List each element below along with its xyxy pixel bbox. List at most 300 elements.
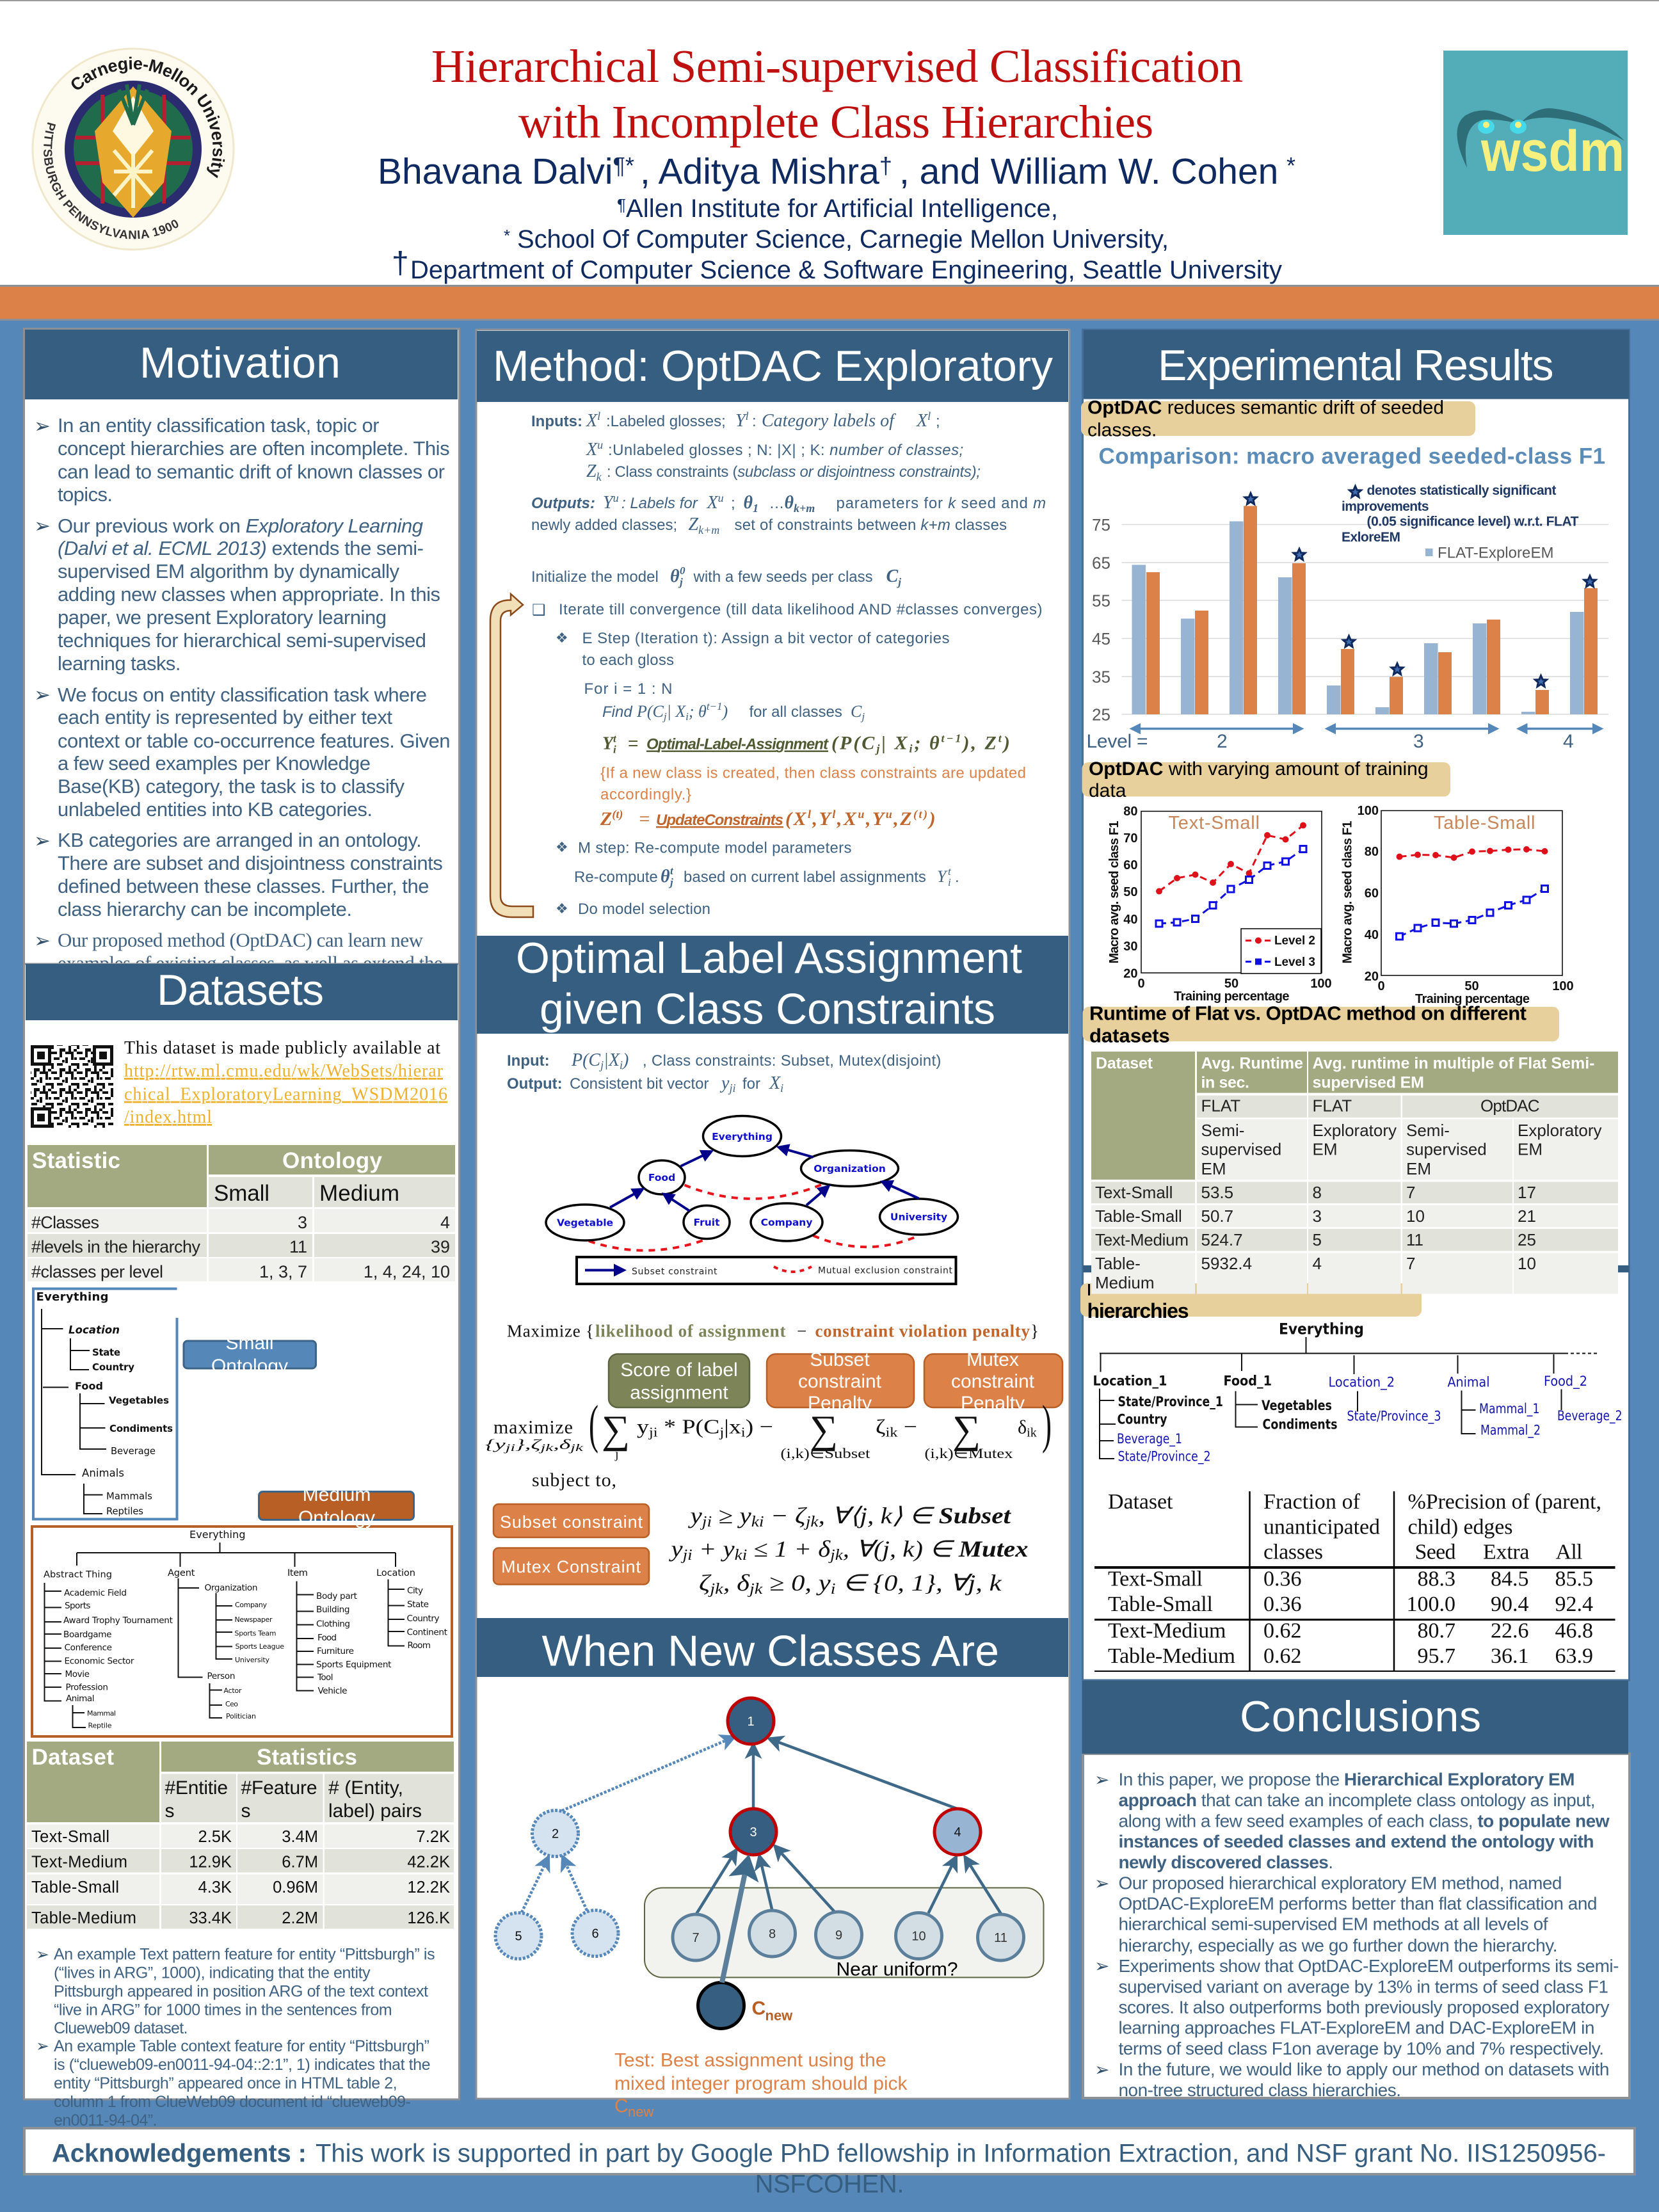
- table: dataset statistics: [27, 1742, 454, 1929]
- optimization objective formula: },ζ: [515, 1436, 543, 1452]
- new class tree diagram: 4: [954, 1825, 961, 1839]
- button: subset constraint: Subset constraint: [500, 1512, 643, 1532]
- table: ontology statistics: Small: [214, 1181, 269, 1206]
- optimal label assignment heading: given Class Constraints: [540, 984, 995, 1033]
- bar chart: macro averaged F1: 25: [1092, 705, 1110, 725]
- table: dataset statistics: 2.5K: [198, 1828, 232, 1846]
- optimization objective formula: (: [589, 1395, 598, 1454]
- conclusions bullet arrows: ➢: [1094, 1873, 1109, 1894]
- affiliations: School Of Computer Science, Carnegie Mellon University,: [510, 225, 1169, 253]
- button: medium ontology: [259, 1484, 413, 1528]
- method body text: j: [678, 576, 683, 588]
- line chart: Text-Small: [1107, 805, 1332, 1004]
- method body text: Class constraints (: [614, 463, 737, 481]
- medium ontology tree: State: [407, 1599, 429, 1610]
- method body text: (t): [612, 808, 623, 821]
- conclusions body text: learning approaches FLAT-ExploreEM and DAC-ExploreEM in: [1119, 2017, 1595, 2038]
- new class tree diagram: 9: [835, 1928, 842, 1943]
- method body text: Iterate till convergence (till data likelihood AND #classes converges): [559, 601, 1042, 618]
- table: runtime: 5932.4: [1201, 1254, 1252, 1273]
- feature example notes: [36, 1945, 435, 2129]
- constraint graph: Company: [761, 1217, 812, 1228]
- dataset availability text: http://rtw.ml.cmu.edu/wk/WebSets/hierar: [124, 1061, 444, 1081]
- medium ontology tree: Food: [317, 1633, 337, 1643]
- table: dataset statistics: 6.7M: [282, 1854, 318, 1871]
- method body text: k seed and m: [948, 495, 1046, 512]
- medium ontology tree: Sports League: [236, 1642, 284, 1651]
- motivation body text: adding new classes when appropriate. In this: [58, 583, 440, 605]
- method heading: [477, 331, 1068, 442]
- small ontology tree: Mammals: [106, 1491, 152, 1502]
- callout: subset constraint penalty: [767, 1349, 914, 1414]
- table: precision of edges: 22.6: [1491, 1619, 1528, 1642]
- constraint formulas: jk: [747, 1581, 763, 1598]
- constraint formulas: [669, 1503, 1028, 1598]
- table: runtime: EM: [1406, 1159, 1431, 1178]
- conclusions body text: approach that can take an incomplete class ontology as input,: [1119, 1790, 1595, 1810]
- medium ontology tree: Agent: [168, 1567, 195, 1578]
- constraint formulas: ≥ 0, y: [762, 1570, 831, 1596]
- table: runtime: 53.5: [1201, 1183, 1233, 1202]
- medium ontology tree: Furniture: [317, 1646, 354, 1656]
- table: dataset statistics: 2.2M: [282, 1909, 318, 1927]
- medium ontology tree: [32, 1527, 452, 1736]
- discovered hierarchy tree: Location_1: [1093, 1374, 1167, 1389]
- new class tree diagram: new: [765, 2007, 793, 2024]
- maximize objective sentence: constraint violation penalty: [815, 1321, 1030, 1340]
- panel: Method and constraints column: [476, 330, 1070, 2120]
- optimization objective formula: ζ: [876, 1415, 884, 1438]
- banner: training data: OptDAC with varying amount of training: [1089, 758, 1429, 780]
- table: runtime: 10: [1406, 1206, 1425, 1226]
- method body text: l: [746, 410, 749, 422]
- motivation body text: In an entity classification task, topic or: [58, 414, 380, 437]
- method body text: with a few seeds per class: [693, 568, 873, 586]
- acknowledgements: NSFCOHEN.: [755, 2170, 904, 2198]
- title: [431, 40, 1243, 148]
- medium ontology tree: Newspaper: [234, 1615, 273, 1624]
- table: runtime: 7: [1406, 1254, 1415, 1273]
- motivation body text: context or table co-occurrence features. Given: [58, 730, 451, 752]
- table: precision of edges: 90.4: [1491, 1592, 1528, 1616]
- table: precision of edges: Fraction of: [1263, 1490, 1361, 1514]
- medium ontology tree: Person: [207, 1671, 236, 1681]
- method body text: u: [718, 492, 724, 504]
- conclusions body text: newly discovered classes.: [1119, 1852, 1333, 1872]
- new class tree diagram: Near uniform?: [836, 1959, 958, 1980]
- small ontology tree: Condiments: [109, 1423, 173, 1434]
- method body text: for all classes: [749, 703, 842, 721]
- affiliations: Department of Computer Science & Software Engineering, Seattle University: [410, 256, 1282, 284]
- medium ontology tree: Sports Equipment: [316, 1660, 392, 1670]
- constraint formulas: jk: [708, 1581, 723, 1598]
- callout: subset constraint penalty: Subset: [810, 1349, 870, 1370]
- QR code: [31, 1045, 113, 1128]
- maximize objective sentence: −: [797, 1321, 806, 1340]
- feature example notes: (“lives in ARG”, 1000), indicating that the entity: [54, 1964, 371, 1982]
- method body text: {If a new class is created, then class constraints are updated: [600, 764, 1026, 782]
- method body text: X: [707, 493, 718, 513]
- medium ontology tree: Actor: [224, 1687, 242, 1695]
- input output text: Consistent bit vector: [570, 1075, 709, 1093]
- new class tree diagram: 6: [591, 1927, 599, 1941]
- constraint formulas: Subset: [939, 1503, 1011, 1528]
- small ontology tree: Everything: [36, 1290, 109, 1304]
- table: precision of edges: %Precision of (parent,: [1408, 1490, 1601, 1514]
- table: precision of edges: 85.5: [1555, 1567, 1593, 1591]
- line chart: Text-Small: 80: [1123, 805, 1138, 819]
- table: precision of edges: classes: [1263, 1540, 1323, 1564]
- medium ontology tree: Boardgame: [63, 1630, 111, 1640]
- title: with Incomplete Class Hierarchies: [518, 96, 1153, 148]
- bullet arrows: ➢: [34, 830, 51, 853]
- line chart: Text-Small: 20: [1123, 966, 1138, 981]
- method body text: u: [886, 808, 894, 821]
- chart title: Comparison: macro averaged seeded-class F1: [1098, 444, 1605, 469]
- optimization objective formula: jk: [568, 1443, 584, 1454]
- method body text: UpdateConstraints: [656, 812, 783, 829]
- motivation body text: There are subset and disjointness constraints: [58, 852, 443, 874]
- new class tree diagram: 5: [515, 1929, 522, 1943]
- input output text: P(C: [571, 1050, 600, 1070]
- table: runtime: Table-: [1095, 1254, 1141, 1273]
- table: precision of edges: 63.9: [1555, 1644, 1593, 1668]
- conclusions bullet arrows: ➢: [1094, 2059, 1109, 2080]
- line chart: Table-Small: 100: [1552, 979, 1574, 993]
- method body text: newly added classes;: [531, 517, 677, 534]
- table: precision of edges: Table-Small: [1108, 1592, 1213, 1616]
- test note: mixed integer program should pick: [614, 2073, 908, 2094]
- table: precision of edges: Seed: [1415, 1540, 1455, 1564]
- line chart: Text-Small: Training percentage: [1174, 990, 1289, 1004]
- method body text: Optimal-Label-Assignment: [646, 736, 829, 753]
- callout: score of label assignment: [609, 1354, 749, 1407]
- table: runtime: Text-Small: [1095, 1183, 1173, 1202]
- new class tree diagram: 10: [911, 1929, 926, 1943]
- method body text: Inputs:: [531, 413, 582, 430]
- optimization objective formula: i: [741, 1425, 746, 1440]
- method body text: :Labeled glosses;: [606, 413, 726, 430]
- medium ontology tree: University: [235, 1656, 269, 1664]
- table: precision of edges: Extra: [1483, 1540, 1530, 1564]
- method body text: Y: [735, 411, 748, 431]
- method body text: k+m: [698, 524, 719, 536]
- results heading: [1084, 330, 1629, 399]
- callout: subset constraint penalty: Penalty: [808, 1393, 872, 1414]
- table: ontology statistics: 1, 3, 7: [259, 1262, 307, 1281]
- line chart: Table-Small: 50: [1464, 979, 1479, 993]
- method body text: Outputs:: [531, 495, 595, 512]
- line chart: Text-Small: Macro avg. seed class F1: [1107, 821, 1121, 964]
- optimal label assignment heading: Optimal Label Assignment: [516, 934, 1022, 982]
- method body text: (t): [913, 808, 929, 821]
- bullet arrows: ➢: [34, 684, 51, 707]
- small ontology tree: State: [92, 1347, 120, 1358]
- motivation body text: each entity is represented by either text: [58, 706, 392, 728]
- method body text: P(C: [636, 702, 664, 721]
- conclusions body text: non-tree structured class hierarchies.: [1119, 2080, 1401, 2100]
- banner: training data: [1082, 758, 1450, 801]
- small ontology tree: Vegetables: [109, 1395, 169, 1406]
- line chart: Table-Small: 0: [1377, 979, 1385, 993]
- method body text: j: [896, 576, 901, 588]
- input output text: i: [620, 1059, 623, 1071]
- banner: runtime: Runtime of Flat vs. OptDAC method on different: [1089, 1002, 1527, 1024]
- table: runtime: Exploratory: [1518, 1121, 1601, 1140]
- line chart: Table-Small: 40: [1365, 928, 1379, 942]
- method bullet icons: ❖: [556, 840, 568, 856]
- new class tree diagram: [495, 1698, 1043, 2029]
- feature example notes: Clueweb09 dataset.: [54, 2019, 188, 2037]
- method body text: j: [668, 876, 673, 888]
- table: dataset statistics: Table-Medium: [31, 1909, 136, 1927]
- line chart: Table-Small: 60: [1365, 886, 1379, 901]
- table: precision of edges: 92.4: [1555, 1592, 1593, 1616]
- poster header: [0, 0, 1659, 321]
- method body text: =: [637, 808, 651, 830]
- table: runtime: 7: [1406, 1183, 1415, 1202]
- callout: score of label assignment: Score of label: [620, 1359, 738, 1381]
- table: ontology statistics: Medium: [319, 1181, 399, 1206]
- optimal label assignment heading: [477, 934, 1068, 1034]
- method body text: C: [851, 702, 862, 721]
- method body text: Initialize the model: [531, 568, 659, 586]
- discovered hierarchy tree: Condiments: [1262, 1417, 1338, 1432]
- input output text: Input:: [507, 1052, 550, 1070]
- optimization objective formula: (i,k)∈Mutex: [924, 1445, 1013, 1461]
- method body text: θ: [785, 493, 794, 513]
- table: precision of edges: Text-Medium: [1108, 1619, 1226, 1642]
- table: precision of edges: unanticipated: [1263, 1516, 1380, 1539]
- method body text: ): [927, 808, 937, 830]
- conclusions bullet arrows: [1094, 1769, 1109, 2080]
- feature example notes: ➢: [36, 2037, 49, 2055]
- optimization objective formula: ji: [503, 1443, 515, 1454]
- line chart: Table-Small: Training percentage: [1415, 992, 1530, 1006]
- button: mutex constraint: [493, 1548, 649, 1585]
- medium ontology tree: Company: [235, 1601, 267, 1609]
- motivation body text: concept hierarchies are often incomplete. This: [58, 437, 450, 460]
- motivation body text: learning tasks.: [58, 652, 180, 675]
- table: ontology statistics: 1, 4, 24, 10: [364, 1262, 450, 1281]
- method body text: Y: [602, 733, 615, 754]
- graph legend: Subset constraint: [632, 1267, 717, 1277]
- table: ontology statistics: #Classes: [31, 1213, 99, 1232]
- table: precision of edges: child) edges: [1408, 1516, 1513, 1539]
- method body text: M step: Re-compute model parameters: [578, 840, 851, 856]
- button: medium ontology: Ontology: [298, 1507, 375, 1528]
- small ontology tree: Animals: [82, 1467, 124, 1479]
- method body text: u: [597, 438, 603, 451]
- table: runtime: 10: [1518, 1254, 1536, 1273]
- table: ontology statistics: 11: [289, 1237, 307, 1256]
- new class tree diagram: 8: [769, 1927, 776, 1941]
- input output text: ): [621, 1050, 629, 1070]
- test note: new: [628, 2104, 653, 2120]
- medium ontology tree: Item: [287, 1567, 308, 1578]
- table: runtime: Avg. Runtime: [1201, 1055, 1303, 1073]
- button: subset constraint: [493, 1504, 649, 1537]
- medium ontology tree: Mammal: [87, 1709, 116, 1718]
- medium ontology tree: Award Trophy Tournament: [63, 1615, 173, 1626]
- banner: training data: data: [1089, 780, 1126, 801]
- constraint formulas: ji: [680, 1547, 693, 1564]
- method body text: : Labels for: [621, 495, 698, 512]
- optimization objective formula: subject to,: [532, 1470, 616, 1491]
- new class tree diagram: 3: [749, 1825, 757, 1839]
- button: mutex constraint: Mutex Constraint: [501, 1557, 641, 1576]
- banner: semantic drift: [1081, 397, 1475, 440]
- new classes heading: When New Classes Are: [541, 1627, 999, 1676]
- medium ontology tree: Politician: [226, 1712, 256, 1720]
- constraint formulas: , ∀⟨j, k⟩ ∈: [819, 1503, 939, 1528]
- method body text: Y: [937, 867, 948, 886]
- discovered hierarchy tree: Mammal_1: [1479, 1401, 1540, 1417]
- callout: subset constraint penalty: constraint: [798, 1371, 882, 1392]
- method body text: Z: [600, 808, 612, 830]
- near uniform region: [645, 1888, 1043, 1978]
- level labels: Level =: [1087, 731, 1148, 752]
- table: precision of edges: 95.7: [1417, 1644, 1455, 1668]
- table: runtime: 11: [1406, 1230, 1423, 1249]
- discovered hierarchy tree: Vegetables: [1262, 1398, 1332, 1413]
- table: precision of edges: 88.3: [1417, 1567, 1455, 1591]
- medium ontology tree: Sports Team: [234, 1630, 276, 1637]
- medium ontology tree: Economic Sector: [64, 1656, 134, 1667]
- method body text: =: [628, 733, 638, 753]
- new class tree diagram: 2: [552, 1827, 559, 1841]
- authors: ¶*: [613, 152, 634, 179]
- method body text: ), Z: [961, 732, 998, 754]
- medium ontology tree: Reptile: [88, 1722, 112, 1729]
- constraint formulas: ki: [751, 1514, 764, 1530]
- method body text: X: [916, 411, 928, 431]
- panel: Datasets: [24, 964, 460, 2129]
- table: dataset statistics: #Entitie: [165, 1777, 228, 1799]
- optimization objective formula: ik: [1027, 1426, 1037, 1440]
- input output text: for: [742, 1075, 760, 1093]
- table: runtime: Medium: [1095, 1273, 1154, 1292]
- method body text: X: [586, 440, 598, 460]
- constraint formulas: ∈ {0, 1}, ∀j, k: [836, 1570, 1002, 1596]
- table: dataset statistics: 7.2K: [417, 1828, 450, 1846]
- table: dataset statistics: 4.3K: [198, 1879, 232, 1896]
- graph legend: Mutual exclusion constraint: [818, 1266, 952, 1276]
- medium ontology tree: Sports: [65, 1601, 91, 1611]
- method body text: k+m: [794, 502, 815, 515]
- datasets heading: Datasets: [157, 966, 324, 1014]
- table: runtime: Table-Small: [1095, 1206, 1182, 1226]
- test note: C: [614, 2096, 629, 2117]
- input output text: |X: [604, 1050, 620, 1070]
- table: dataset statistics: Statistics: [257, 1745, 357, 1770]
- line chart: Text-Small: 50: [1123, 885, 1138, 899]
- method body text: …: [769, 495, 785, 512]
- medium ontology tree: Organization: [205, 1583, 257, 1593]
- conclusions body text: Experiments show that OptDAC-ExploreEM outperforms its semi-: [1119, 1956, 1619, 1976]
- method body text: set of constraints between: [735, 517, 920, 534]
- table: runtime: FLAT: [1312, 1096, 1352, 1115]
- motivation body text: We focus on entity classification task where: [58, 684, 427, 706]
- small ontology tree: [33, 1289, 177, 1519]
- method body text: .: [955, 869, 959, 886]
- table: ontology statistics: [28, 1145, 455, 1281]
- authors: , and William W. Cohen: [899, 151, 1278, 192]
- small ontology tree: Food: [75, 1380, 103, 1392]
- input output text: i: [780, 1082, 783, 1094]
- discovered hierarchy tree: Animal: [1448, 1375, 1490, 1390]
- constraint formulas: + y: [693, 1536, 735, 1562]
- affiliations: †: [392, 246, 409, 280]
- medium ontology tree: Location: [376, 1567, 415, 1578]
- method body text: 0: [680, 565, 685, 577]
- line chart: Table-Small: 80: [1365, 845, 1379, 859]
- method body text: l: [832, 808, 837, 821]
- method body text: :: [607, 463, 611, 481]
- motivation body text: class hierarchy can be incomplete.: [58, 898, 352, 920]
- line chart: Text-Small: 100: [1310, 977, 1332, 991]
- panel: Experimental Results: [1080, 330, 1630, 1680]
- table: ontology statistics: 4: [440, 1213, 450, 1232]
- table: precision of edges: 0.36: [1263, 1567, 1302, 1591]
- method body text: subclass or disjointness constraints);: [737, 463, 981, 481]
- hidden section band edges behind table: [1083, 1265, 1629, 1272]
- panel: Motivation: [24, 329, 460, 974]
- constraint formulas: ζ: [699, 1570, 709, 1596]
- optimization objective formula: −: [898, 1415, 917, 1438]
- table: runtime: supervised EM: [1312, 1074, 1424, 1092]
- button: small ontology: Small: [225, 1333, 274, 1354]
- table: precision of edges: Table-Medium: [1108, 1644, 1235, 1668]
- conclusions bullet arrows: ➢: [1094, 1955, 1109, 1976]
- acknowledgements: This work is supported in part by Google PhD fellowship in Information Extraction, and NSF grant No. IIS1250956-: [316, 2139, 1606, 2167]
- constraint graph: University: [890, 1211, 947, 1222]
- discovered hierarchy tree: Mammal_2: [1480, 1422, 1541, 1439]
- method body text: i: [948, 876, 951, 888]
- line chart: Text-Small: 60: [1123, 858, 1138, 872]
- optimization objective formula: |x: [724, 1415, 741, 1438]
- orange band: [0, 287, 1659, 319]
- constraint formulas: jk: [828, 1547, 843, 1564]
- constraint graph: Everything: [712, 1131, 773, 1142]
- discovered hierarchy tree: [1093, 1320, 1622, 1464]
- significance stars: [1245, 486, 1596, 687]
- test note: Test: Best assignment using the: [614, 2049, 886, 2071]
- table: dataset statistics: 0.96M: [273, 1879, 318, 1896]
- bar chart: macro averaged F1: 55: [1092, 591, 1110, 611]
- constraint graph: Organization: [813, 1163, 886, 1174]
- feature example notes: ➢: [36, 1945, 49, 1964]
- feature example notes: An example Table context feature for entity “Pittsburgh”: [54, 2037, 429, 2055]
- line chart: Text-Small: 30: [1123, 940, 1138, 954]
- method bullet icons: ❑: [532, 601, 546, 619]
- input output text: y: [719, 1073, 730, 1093]
- optimization objective formula: ): [1042, 1395, 1052, 1454]
- table: ontology statistics: #levels in the hierarchy: [31, 1237, 201, 1256]
- conclusions body text: In this paper, we propose the Hierarchical Exploratory EM: [1119, 1769, 1575, 1790]
- new class tree diagram: 7: [692, 1931, 700, 1945]
- new class tree diagram: 11: [994, 1931, 1007, 1945]
- table: ontology statistics: Statistic: [32, 1148, 120, 1173]
- logo: Carnegie Mellon seal: [32, 47, 234, 251]
- method body text: ,Z: [893, 808, 913, 830]
- method heading: Method: OptDAC Exploratory: [493, 342, 1053, 390]
- callout: mutex constraint penalty: Penalty: [961, 1393, 1025, 1414]
- feature example notes: en0011-94-04”.: [54, 2112, 157, 2129]
- method body text: j: [874, 742, 881, 755]
- table: runtime: FLAT: [1201, 1096, 1240, 1115]
- method bullet icons: [532, 601, 568, 917]
